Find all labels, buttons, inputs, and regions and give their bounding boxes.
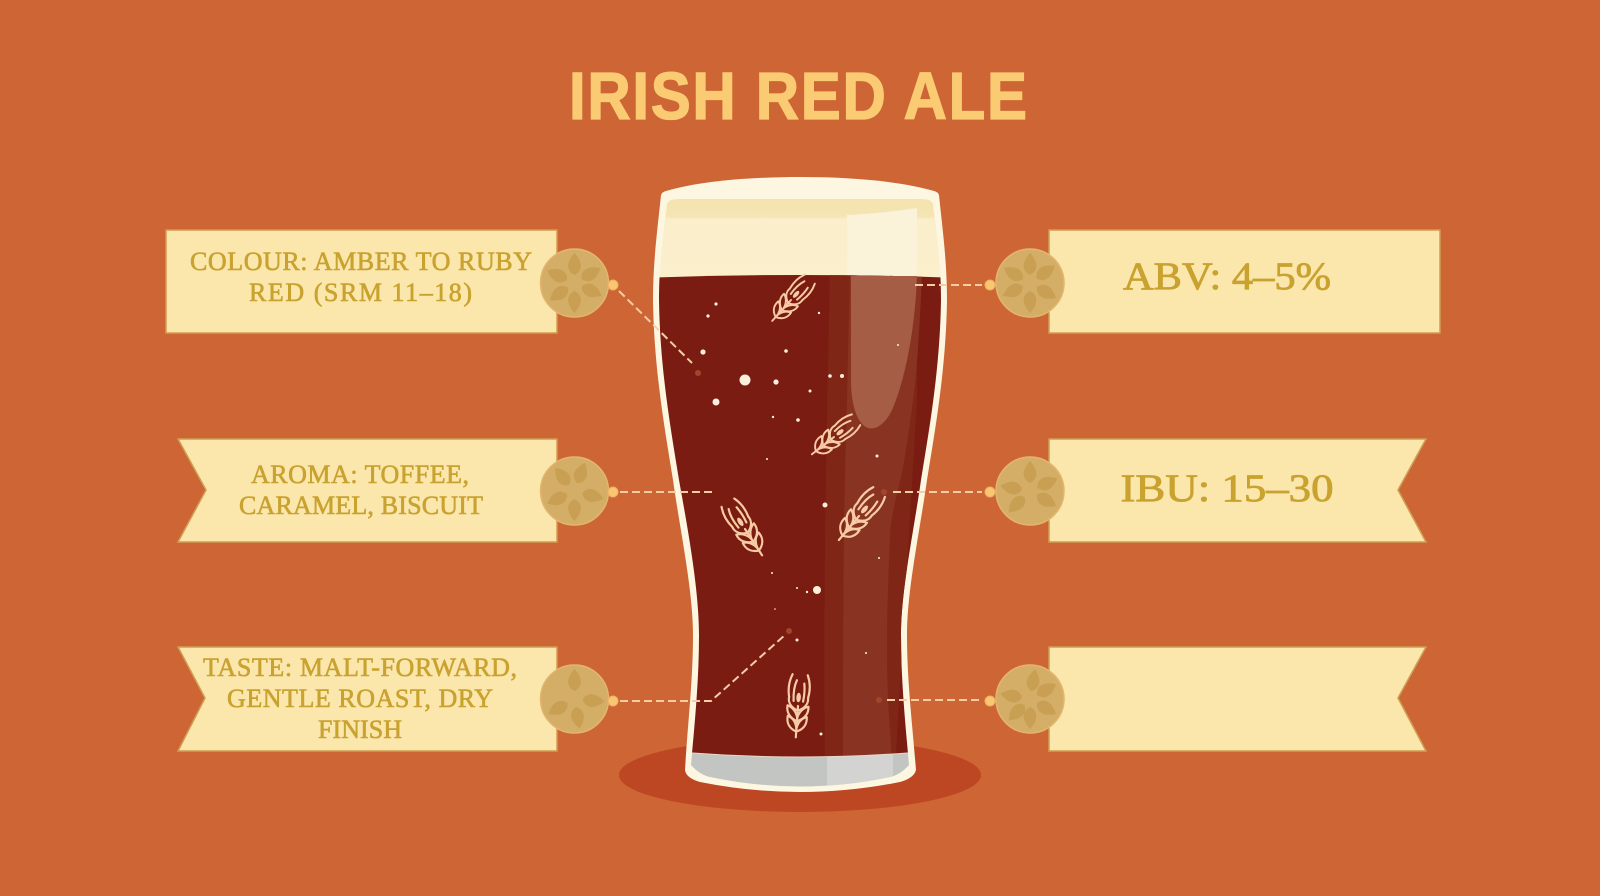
panel: colour	[166, 230, 618, 333]
panel: aroma	[178, 439, 618, 542]
leader: empty banner	[887, 699, 982, 701]
glass shadow	[619, 738, 981, 812]
beer	[659, 275, 941, 756]
base reflection	[827, 754, 893, 786]
panel: ibu	[985, 439, 1426, 542]
icon: grain medallion	[996, 249, 1064, 317]
anchor: ibu	[881, 489, 887, 495]
dim band	[824, 270, 917, 770]
panel: empty banner	[985, 647, 1426, 751]
pint glass	[640, 177, 960, 800]
banner	[1049, 439, 1426, 542]
leader: aroma	[620, 491, 712, 493]
title: IRISH RED ALE	[569, 59, 1027, 134]
leader lines	[619, 285, 982, 703]
wheat icon 1	[765, 273, 817, 327]
leader: ibu	[893, 491, 982, 493]
leader: abv	[915, 284, 982, 286]
foam	[660, 199, 940, 278]
sheen	[843, 270, 922, 770]
label text: ABV: 4–5%	[1123, 255, 1331, 298]
label text: TASTE: MALT-FORWARD,	[203, 653, 517, 682]
banner	[1049, 647, 1426, 751]
wheat icon 2	[806, 412, 862, 462]
leader: taste	[620, 635, 785, 701]
banner	[178, 439, 557, 542]
connector dot	[985, 280, 995, 290]
bubbles	[700, 302, 899, 736]
icon: grain medallion	[996, 665, 1064, 733]
icon: grain medallion	[540, 249, 608, 317]
beer shading	[824, 270, 922, 770]
wheat icon 3	[719, 497, 771, 561]
glass contents	[659, 199, 941, 786]
wheat icon 5	[785, 674, 811, 738]
foam highlight	[847, 208, 917, 276]
glass outline	[653, 177, 947, 792]
label text line 3: FINISH	[318, 715, 402, 744]
label text line 2: GENTLE ROAST, DRY	[227, 684, 493, 713]
label text: COLOUR: AMBER TO RUBY	[190, 247, 532, 276]
banner	[166, 230, 557, 333]
leader: colour	[619, 291, 692, 363]
label text line 2: CARAMEL, BISCUIT	[239, 491, 483, 520]
anchor: taste	[786, 628, 792, 634]
icon: grain medallion	[996, 457, 1064, 525]
connector dot	[608, 487, 618, 497]
glass base	[691, 740, 909, 786]
connector dot	[608, 280, 618, 290]
banner	[1049, 230, 1440, 333]
icon: grain medallion	[540, 457, 608, 525]
beer highlight	[851, 276, 917, 428]
label text line 2: RED (SRM 11–18)	[249, 278, 472, 307]
wheat icon 4	[831, 485, 887, 547]
connector dot	[608, 696, 618, 706]
connector dot	[985, 696, 995, 706]
anchor: colour	[695, 370, 701, 376]
banner	[178, 647, 557, 751]
panel: abv	[985, 230, 1440, 333]
connector dot	[985, 487, 995, 497]
beer bottom line	[692, 752, 908, 758]
label text: AROMA: TOFFEE,	[251, 460, 469, 489]
icon: grain medallion	[540, 665, 608, 733]
panel: taste	[178, 647, 618, 751]
anchor: empty banner	[876, 697, 882, 703]
label text: IBU: 15–30	[1120, 467, 1334, 510]
